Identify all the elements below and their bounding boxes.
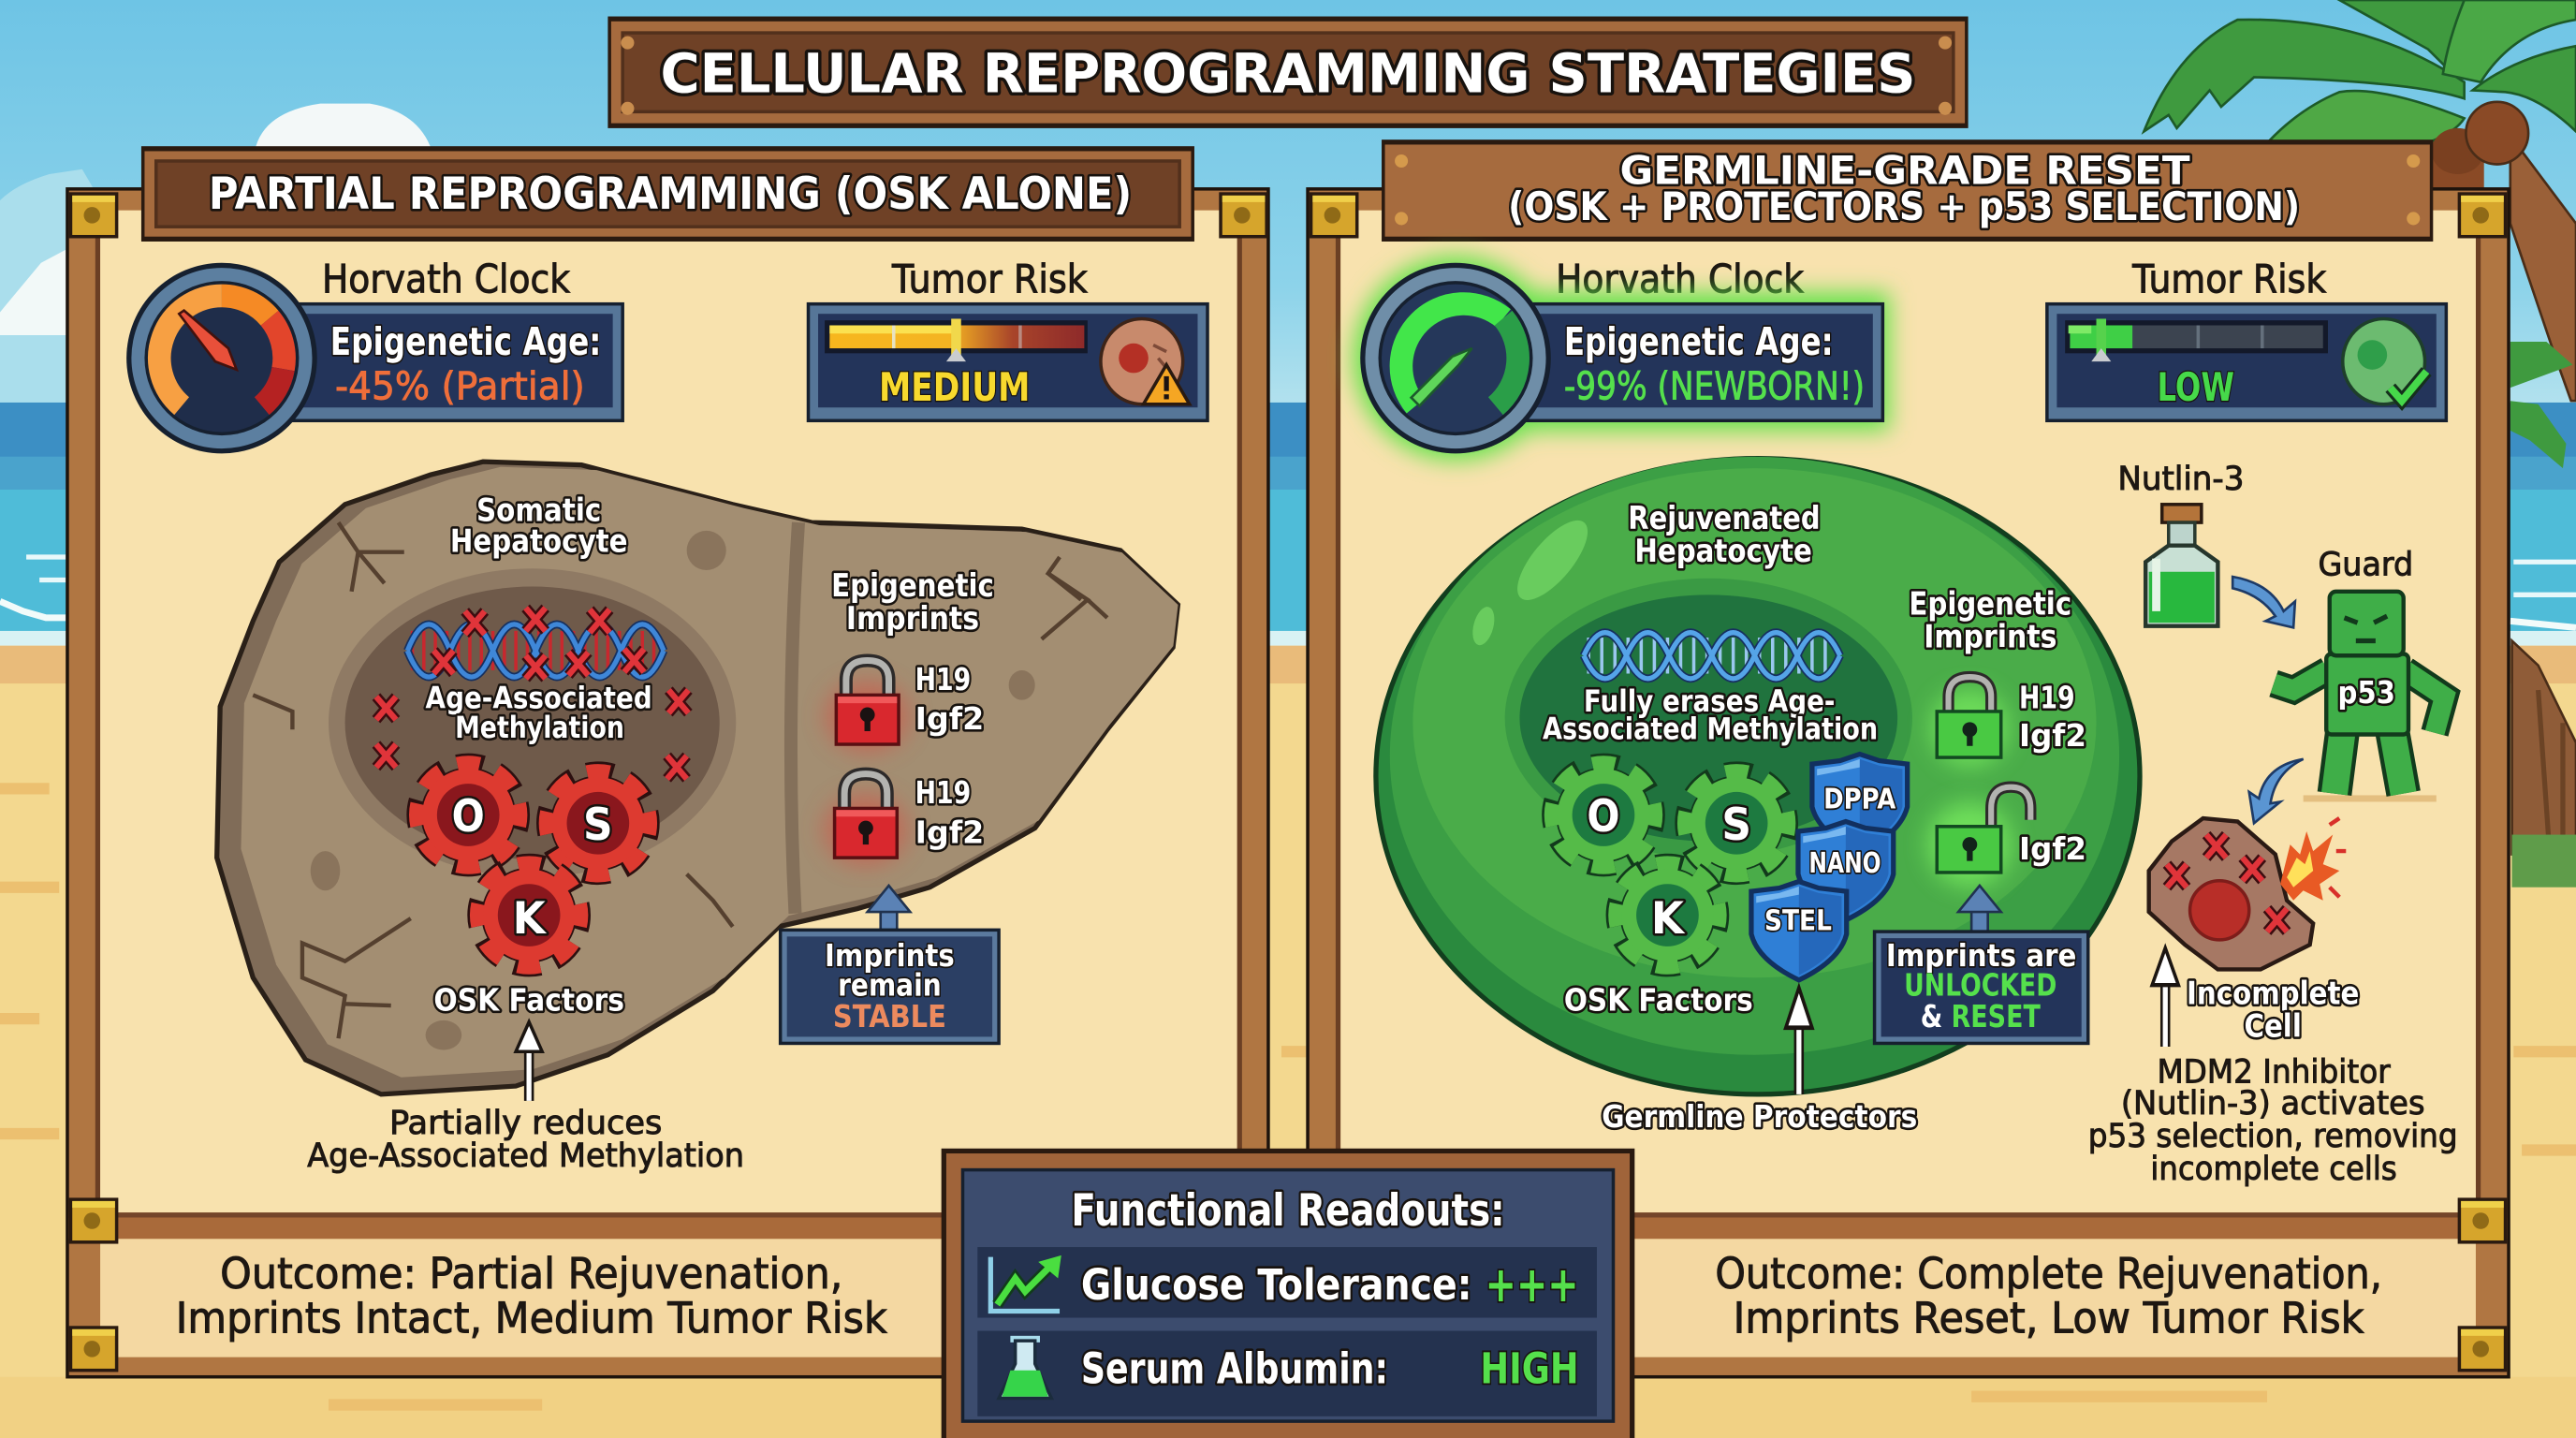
caption: mdm2 inhibitor: [2088, 1053, 2458, 1188]
label: guard: Guard: [2318, 545, 2413, 583]
label: age-associated methylation: [426, 680, 652, 745]
labels: h19 and igf2: [2019, 679, 2086, 867]
icon: locks with imprints: Igf2: [915, 700, 984, 737]
removed methyl marks: [376, 690, 688, 779]
arrow: guard to cell: [2249, 759, 2304, 823]
epigenetic age readout left: [279, 302, 624, 422]
panel: functional readouts: [942, 1149, 1634, 1438]
label: age-associated methylation: Age-Associated: [426, 680, 652, 715]
label: OSK factors: OSK Factors: [1564, 981, 1753, 1018]
label: OSK factors: OSK Factors: [433, 981, 624, 1018]
label: epigenetic imprints: Epigenetic: [1909, 585, 2071, 623]
tumor risk panel right: LOW: [2157, 364, 2234, 410]
shields: germline protectors: NANO: [1808, 847, 1881, 880]
arrow: imprints unlocked: [1958, 886, 2001, 932]
label: somatic hepatocyte: [450, 492, 627, 561]
row: glucose tolerance: +++: [1486, 1256, 1579, 1313]
outcome box right: Imprints Reset, Low Tumor Risk: [1734, 1293, 2364, 1343]
outcome box right: [1340, 1239, 2476, 1357]
icon: rising chart: [990, 1255, 1061, 1312]
gears: OSK factors red: K: [513, 893, 548, 945]
label: epigenetic imprints: Epigenetic: [831, 567, 994, 605]
cloud: left edge: [0, 169, 98, 403]
glow behind clock: [1354, 257, 1889, 460]
label: nutlin-3: Nutlin-3: [2117, 460, 2244, 498]
gears: OSK factors green: S: [1721, 800, 1751, 851]
label: somatic hepatocyte: Hepatocyte: [450, 523, 627, 561]
icon: incomplete cell: [2149, 818, 2346, 969]
labels: h19 and igf2: Igf2: [2019, 717, 2086, 754]
epigenetic age readout right: [1519, 302, 1884, 422]
label: fully erases methylation: [1543, 683, 1878, 747]
arrow: protectors: [1786, 988, 1812, 1094]
label: incomplete cell: Cell: [2244, 1007, 2302, 1045]
cloud: left hill: [255, 104, 432, 151]
gauge: horvath clock left: [126, 263, 317, 453]
label: epigenetic imprints: [1909, 585, 2071, 655]
callout: imprints stable: STABLE: [833, 998, 946, 1034]
callout: imprints unlocked: Imprints are: [1886, 937, 2076, 974]
figure: p53 guard: p53: [2338, 674, 2395, 711]
row: serum albumin: [977, 1331, 1597, 1416]
cell: rejuvenated hepatocyte: [1376, 457, 2140, 1094]
caption: mdm2 inhibitor: incomplete cells: [2150, 1150, 2397, 1188]
banner: partial reprogramming: [141, 146, 1194, 242]
icon: locks with imprints: H19: [915, 774, 971, 811]
icon: locks with imprints: Igf2: [915, 814, 984, 850]
label: germline protectors: Germline Protectors: [1602, 1098, 1917, 1135]
label: age-associated methylation: Methylation: [455, 710, 624, 745]
callout: imprints unlocked: UNLOCKED: [1904, 967, 2056, 1004]
banner: germline-grade reset: [1382, 139, 2433, 242]
outcome box left: [100, 1239, 1237, 1357]
figure: p53 guard: [2274, 592, 2445, 801]
dna: clean helix: [1584, 633, 1840, 679]
gauge: horvath clock right: [1360, 263, 1551, 453]
label: epigenetic imprints: [831, 567, 994, 638]
dna with methylation marks: [407, 608, 664, 679]
icon: locks with imprints: [823, 661, 984, 866]
caption: mdm2 inhibitor: (Nutlin-3) activates: [2121, 1084, 2425, 1123]
outcome box right: Outcome: Complete Rejuvenation,: [1715, 1249, 2382, 1299]
banner: partial reprogramming: PARTIAL REPROGRAMMING (OSK ALONE): [209, 169, 1132, 220]
gears: OSK factors red: O: [452, 791, 485, 843]
label: incomplete cell: [2187, 975, 2359, 1045]
gears: OSK factors red: S: [583, 800, 613, 851]
outcome box left: Imprints Intact, Medium Tumor Risk: [176, 1293, 887, 1343]
label: epigenetic imprints: Imprints: [846, 600, 979, 638]
banner: germline-grade reset: (OSK + PROTECTORS + p53 SELECTION): [1508, 183, 2300, 229]
gears: OSK factors green: [1543, 755, 1797, 976]
tumor risk label left: Tumor Risk: [891, 256, 1088, 301]
heading: functional readouts: Functional Readouts:: [1071, 1185, 1505, 1237]
arrow: osk factors: [516, 1022, 542, 1101]
palm tree: [2144, 0, 2576, 888]
callout: imprints stable: [779, 929, 1001, 1045]
callout: imprints unlocked: [1873, 930, 2089, 1045]
label: epigenetic imprints: Imprints: [1924, 618, 2056, 655]
shields: germline protectors: STEL: [1764, 904, 1832, 937]
row: serum albumin: HIGH: [1480, 1344, 1579, 1394]
shields: germline protectors: [1751, 755, 1908, 980]
label: rejuvenated hepatocyte: [1628, 500, 1821, 570]
epigenetic age readout left: -45% (Partial): [335, 363, 585, 408]
title text: CELLULAR REPROGRAMMING STRATEGIES: [661, 41, 1915, 105]
tumor risk panel right: [2045, 302, 2448, 422]
label: incomplete cell: Incomplete: [2187, 975, 2359, 1012]
outcome box left: Outcome: Partial Rejuvenation,: [220, 1249, 842, 1299]
labels: h19 and igf2: H19: [2019, 679, 2075, 715]
label: fully erases methylation: Associated Methylation: [1543, 712, 1878, 747]
epigenetic age readout right: -99% (NEWBORN!): [1564, 363, 1865, 408]
tumor risk label right: Tumor Risk: [2131, 256, 2327, 301]
row: glucose tolerance: Glucose Tolerance:: [1081, 1260, 1472, 1310]
icon: closed green lock: [1930, 677, 2009, 768]
row: glucose tolerance: [977, 1247, 1597, 1318]
icon: open green lock: [1927, 787, 2030, 888]
row: serum albumin: Serum Albumin:: [1081, 1344, 1388, 1394]
arrow: nutlin to guard: [2232, 577, 2295, 627]
caption: partially reduces: Age-Associated Methylation: [307, 1137, 744, 1175]
label: fully erases methylation: Fully erases Age-: [1584, 683, 1835, 719]
icon: aged cell with warning: [1101, 318, 1190, 404]
callout: imprints stable: remain: [838, 967, 942, 1004]
icon: flask: [999, 1336, 1051, 1399]
arrow: imprints stable: [868, 886, 910, 932]
label: somatic hepatocyte: Somatic: [476, 492, 601, 529]
panel: partial reprogramming: [66, 146, 1270, 1378]
gears: OSK factors green: K: [1651, 893, 1686, 945]
horvath clock label right: Horvath Clock: [1556, 256, 1805, 301]
panel: germline-grade reset: [1306, 139, 2510, 1378]
horvath clock label left: Horvath Clock: [322, 256, 571, 301]
liver: somatic hepatocyte: [217, 462, 1178, 1094]
tumor risk panel left: MEDIUM: [879, 364, 1030, 410]
caption: partially reduces: [307, 1104, 744, 1175]
callout: imprints unlocked: & RESET: [1921, 998, 2041, 1034]
label: rejuvenated hepatocyte: Rejuvenated: [1628, 500, 1821, 537]
caption: mdm2 inhibitor: MDM2 Inhibitor: [2157, 1053, 2391, 1092]
arrow: mdm2 to cell: [2152, 948, 2178, 1047]
title banner: [607, 17, 1969, 128]
icon: healthy cell with check: [2343, 318, 2426, 404]
tumor risk panel left: [807, 302, 1209, 422]
callout: imprints stable: Imprints: [825, 937, 955, 974]
epigenetic age readout left: Epigenetic Age:: [330, 319, 601, 364]
gears: OSK factors red: [407, 755, 659, 976]
icon: nutlin-3 bottle: [2145, 505, 2217, 626]
icon: explosion: [2280, 818, 2346, 901]
labels: h19 and igf2: Igf2: [2019, 830, 2086, 867]
icon: locks with imprints: H19: [915, 661, 971, 697]
label: rejuvenated hepatocyte: Hepatocyte: [1634, 533, 1812, 570]
caption: mdm2 inhibitor: p53 selection, removing: [2088, 1117, 2458, 1155]
epigenetic age readout right: Epigenetic Age:: [1564, 319, 1834, 364]
banner: germline-grade reset: GERMLINE-GRADE RESET: [1620, 148, 2190, 194]
gears: OSK factors green: O: [1587, 791, 1620, 843]
caption: partially reduces: Partially reduces: [389, 1104, 662, 1142]
shields: germline protectors: DPPA: [1823, 783, 1895, 815]
